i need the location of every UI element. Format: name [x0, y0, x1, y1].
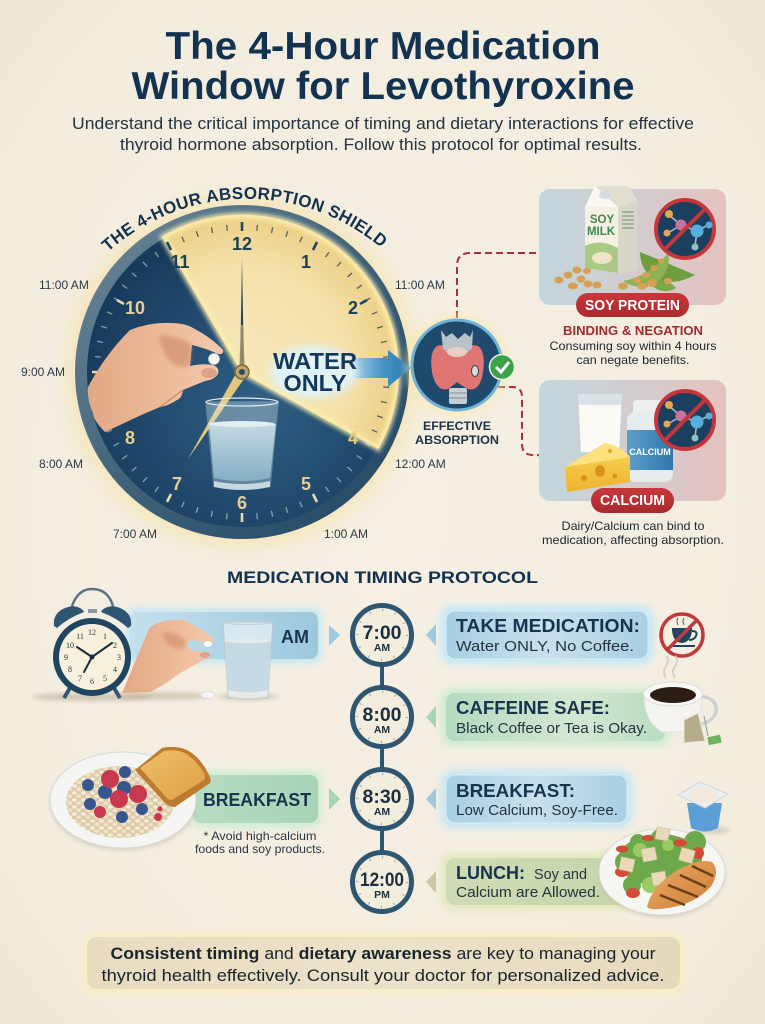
footer callout — [83, 933, 684, 993]
card: lunch: Calcium are Allowed. — [456, 884, 600, 901]
arrow marker — [426, 871, 436, 893]
time labels around clock: 9:00 AM — [21, 365, 65, 379]
card: breakfast: Low Calcium, Soy-Free. — [456, 802, 618, 819]
section heading: MEDICATION TIMING PROTOCOL — [227, 568, 538, 587]
icon: calcium bottle: CALCIUM — [629, 447, 671, 457]
arrow marker — [329, 625, 340, 646]
footer callout: Consistent timing and dietary awareness are key to managing your — [110, 944, 656, 963]
clock numerals: 8 — [125, 428, 135, 448]
left banner: breakfast: BREAKFAST — [203, 790, 311, 810]
icon: soy milk carton: MILK — [587, 226, 616, 238]
icon: alarm clock: 5 — [103, 674, 107, 683]
text: calcium description: Dairy/Calcium can bind to — [562, 519, 705, 533]
footer callout: thyroid health effectively. Consult your doctor for personalized advice. — [102, 966, 664, 985]
clock 7:00 AM: 7:00 — [362, 622, 402, 644]
clock numerals: 12 — [232, 234, 252, 254]
icon: alarm clock: 11 — [76, 632, 84, 641]
clock 12:00 PM: PM — [374, 889, 390, 901]
icon: alarm clock: 1 — [103, 632, 107, 641]
arrow marker — [426, 788, 436, 810]
arrow marker — [329, 788, 340, 810]
time labels around clock: 7:00 AM — [113, 527, 157, 541]
timeline clocks — [352, 606, 412, 912]
icon: alarm clock: 12 — [88, 628, 96, 637]
icon: toast — [135, 747, 211, 807]
left banner: AM — [126, 608, 340, 663]
text: binding and negation — [550, 323, 716, 367]
clock numerals: 7 — [172, 474, 182, 494]
clock 8:30 AM — [352, 770, 412, 828]
arrow: water only: ONLY — [284, 370, 346, 396]
text: calcium description: medication, affecting absorption. — [542, 533, 724, 547]
title: Window for Levothyroxine — [132, 65, 634, 108]
clock 12:00 PM: 12:00 — [360, 869, 404, 891]
subtitle: thyroid hormone absorption. Follow this protocol for optimal results. — [120, 136, 642, 154]
time labels around clock: 12:00 AM — [395, 457, 446, 471]
arrow: water only — [270, 346, 411, 398]
label: soy protein pill: SOY PROTEIN — [585, 298, 680, 314]
card: breakfast — [426, 770, 632, 828]
clock numerals: 11 — [170, 252, 190, 272]
time labels around clock: 1:00 AM — [324, 527, 368, 541]
text: calcium description — [542, 519, 724, 547]
clock numerals: 10 — [125, 298, 145, 318]
clock 7:00 AM: AM — [374, 642, 390, 654]
clock 8:00 AM — [352, 688, 412, 746]
icon: yogurt cup — [678, 782, 730, 834]
note: avoid high-calcium — [195, 829, 325, 856]
icon: no molecule sign — [656, 200, 714, 258]
clock numerals: 2 — [348, 298, 358, 318]
icon: hand holding pill — [88, 323, 223, 432]
card: take medication: Water ONLY, No Coffee. — [456, 638, 634, 655]
icon: alarm clock: 8 — [68, 665, 72, 674]
text: binding and negation: BINDING & NEGATION — [563, 323, 703, 338]
icon: soy milk carton: SOY — [590, 214, 614, 226]
curved heading: THE 4-HOUR ABSORPTION SHIELD — [100, 187, 386, 250]
subtitle: Understand the critical importance of timing and dietary interactions for effective — [72, 115, 694, 133]
text: binding and negation: can negate benefits. — [576, 353, 690, 367]
card: caffeine safe: Black Coffee or Tea is Okay. — [456, 720, 647, 737]
card: breakfast: BREAKFAST: — [456, 781, 575, 801]
icon: coffee cup and tea bag — [644, 656, 722, 745]
icon: soybeans and pod — [554, 252, 695, 291]
icon: no coffee — [661, 614, 703, 656]
title: The 4-Hour Medication — [166, 25, 600, 68]
clock numerals: 5 — [301, 474, 311, 494]
icon: alarm clock: 4 — [113, 665, 117, 674]
clock 12:00 PM — [352, 852, 412, 912]
dashed connector: thyroid to soy panel — [457, 253, 545, 318]
time labels around clock: 11:00 AM — [39, 278, 89, 292]
icon: alarm clock — [32, 589, 152, 701]
icon: glass of water — [218, 620, 278, 700]
icon: salad plate with chicken — [599, 827, 725, 917]
icon: alarm clock: 2 — [113, 641, 117, 650]
icon: thyroid badge — [405, 313, 514, 417]
panel: calcium — [539, 380, 726, 547]
clock 8:00 AM: 8:00 — [362, 704, 402, 726]
icon: alarm clock: 3 — [117, 653, 121, 662]
label: calcium pill — [591, 488, 674, 513]
title — [132, 25, 634, 108]
time labels around clock: 11:00 AM — [395, 278, 445, 292]
card: take medication: TAKE MEDICATION: — [456, 616, 640, 636]
icon: alarm clock: 7 — [78, 674, 82, 683]
note: avoid high-calcium: * Avoid high-calcium — [204, 829, 316, 843]
clock numerals: 4 — [348, 428, 358, 448]
icon: hand with pill — [120, 620, 215, 700]
clock 8:30 AM: AM — [374, 806, 390, 818]
clock numerals: 1 — [301, 252, 311, 272]
text: binding and negation: Consuming soy within 4 hours — [550, 339, 716, 353]
icon: no molecule sign — [656, 391, 714, 449]
note: avoid high-calcium: foods and soy products. — [195, 842, 325, 856]
icon: alarm clock: 10 — [66, 641, 74, 650]
left banner: breakfast — [189, 771, 340, 827]
label: calcium pill: CALCIUM — [600, 493, 665, 509]
card: caffeine safe: CAFFEINE SAFE: — [456, 698, 610, 718]
icon: calcium bottle — [627, 400, 673, 482]
left banner: AM: AM — [281, 627, 309, 647]
arrow: water only: WATER — [273, 348, 357, 374]
card: caffeine safe — [426, 688, 670, 746]
clock: the 4-hour absorption shield — [67, 197, 417, 547]
arrow marker — [426, 706, 436, 728]
icon: oatmeal plate with toast — [50, 747, 211, 850]
card: take medication — [426, 606, 653, 664]
label: effective absorption — [415, 419, 499, 447]
time labels around clock: 8:00 AM — [39, 457, 83, 471]
arrow marker — [426, 624, 436, 646]
clock numerals: 6 — [237, 493, 247, 513]
icon: alarm clock: 6 — [90, 677, 94, 686]
icon: glass of milk — [577, 393, 623, 453]
time labels around clock — [21, 278, 446, 541]
clock hands — [240, 258, 244, 372]
clock 8:30 AM: 8:30 — [362, 786, 402, 808]
light 4-hour window wedge — [163, 215, 398, 448]
card: lunch: LUNCH: — [456, 863, 525, 883]
subtitle — [72, 115, 694, 154]
label: soy protein pill — [576, 293, 689, 317]
icon: alarm clock: 9 — [64, 653, 68, 662]
icon: cheese wedge — [565, 443, 630, 492]
icon: glass of water — [206, 398, 278, 490]
dashed connector: thyroid to calcium panel — [498, 387, 560, 456]
icon: soy milk carton — [585, 186, 637, 273]
timeline connector — [380, 660, 384, 860]
clock 7:00 AM — [352, 606, 412, 664]
label: effective absorption: ABSORPTION — [415, 433, 499, 447]
clock numerals — [125, 234, 358, 513]
card: lunch — [426, 853, 631, 910]
panel: soy protein — [539, 186, 726, 367]
clock 8:00 AM: AM — [374, 724, 390, 736]
label: effective absorption: EFFECTIVE — [423, 419, 491, 433]
icon: check mark — [490, 354, 514, 380]
card: lunch: Soy and — [534, 866, 587, 883]
